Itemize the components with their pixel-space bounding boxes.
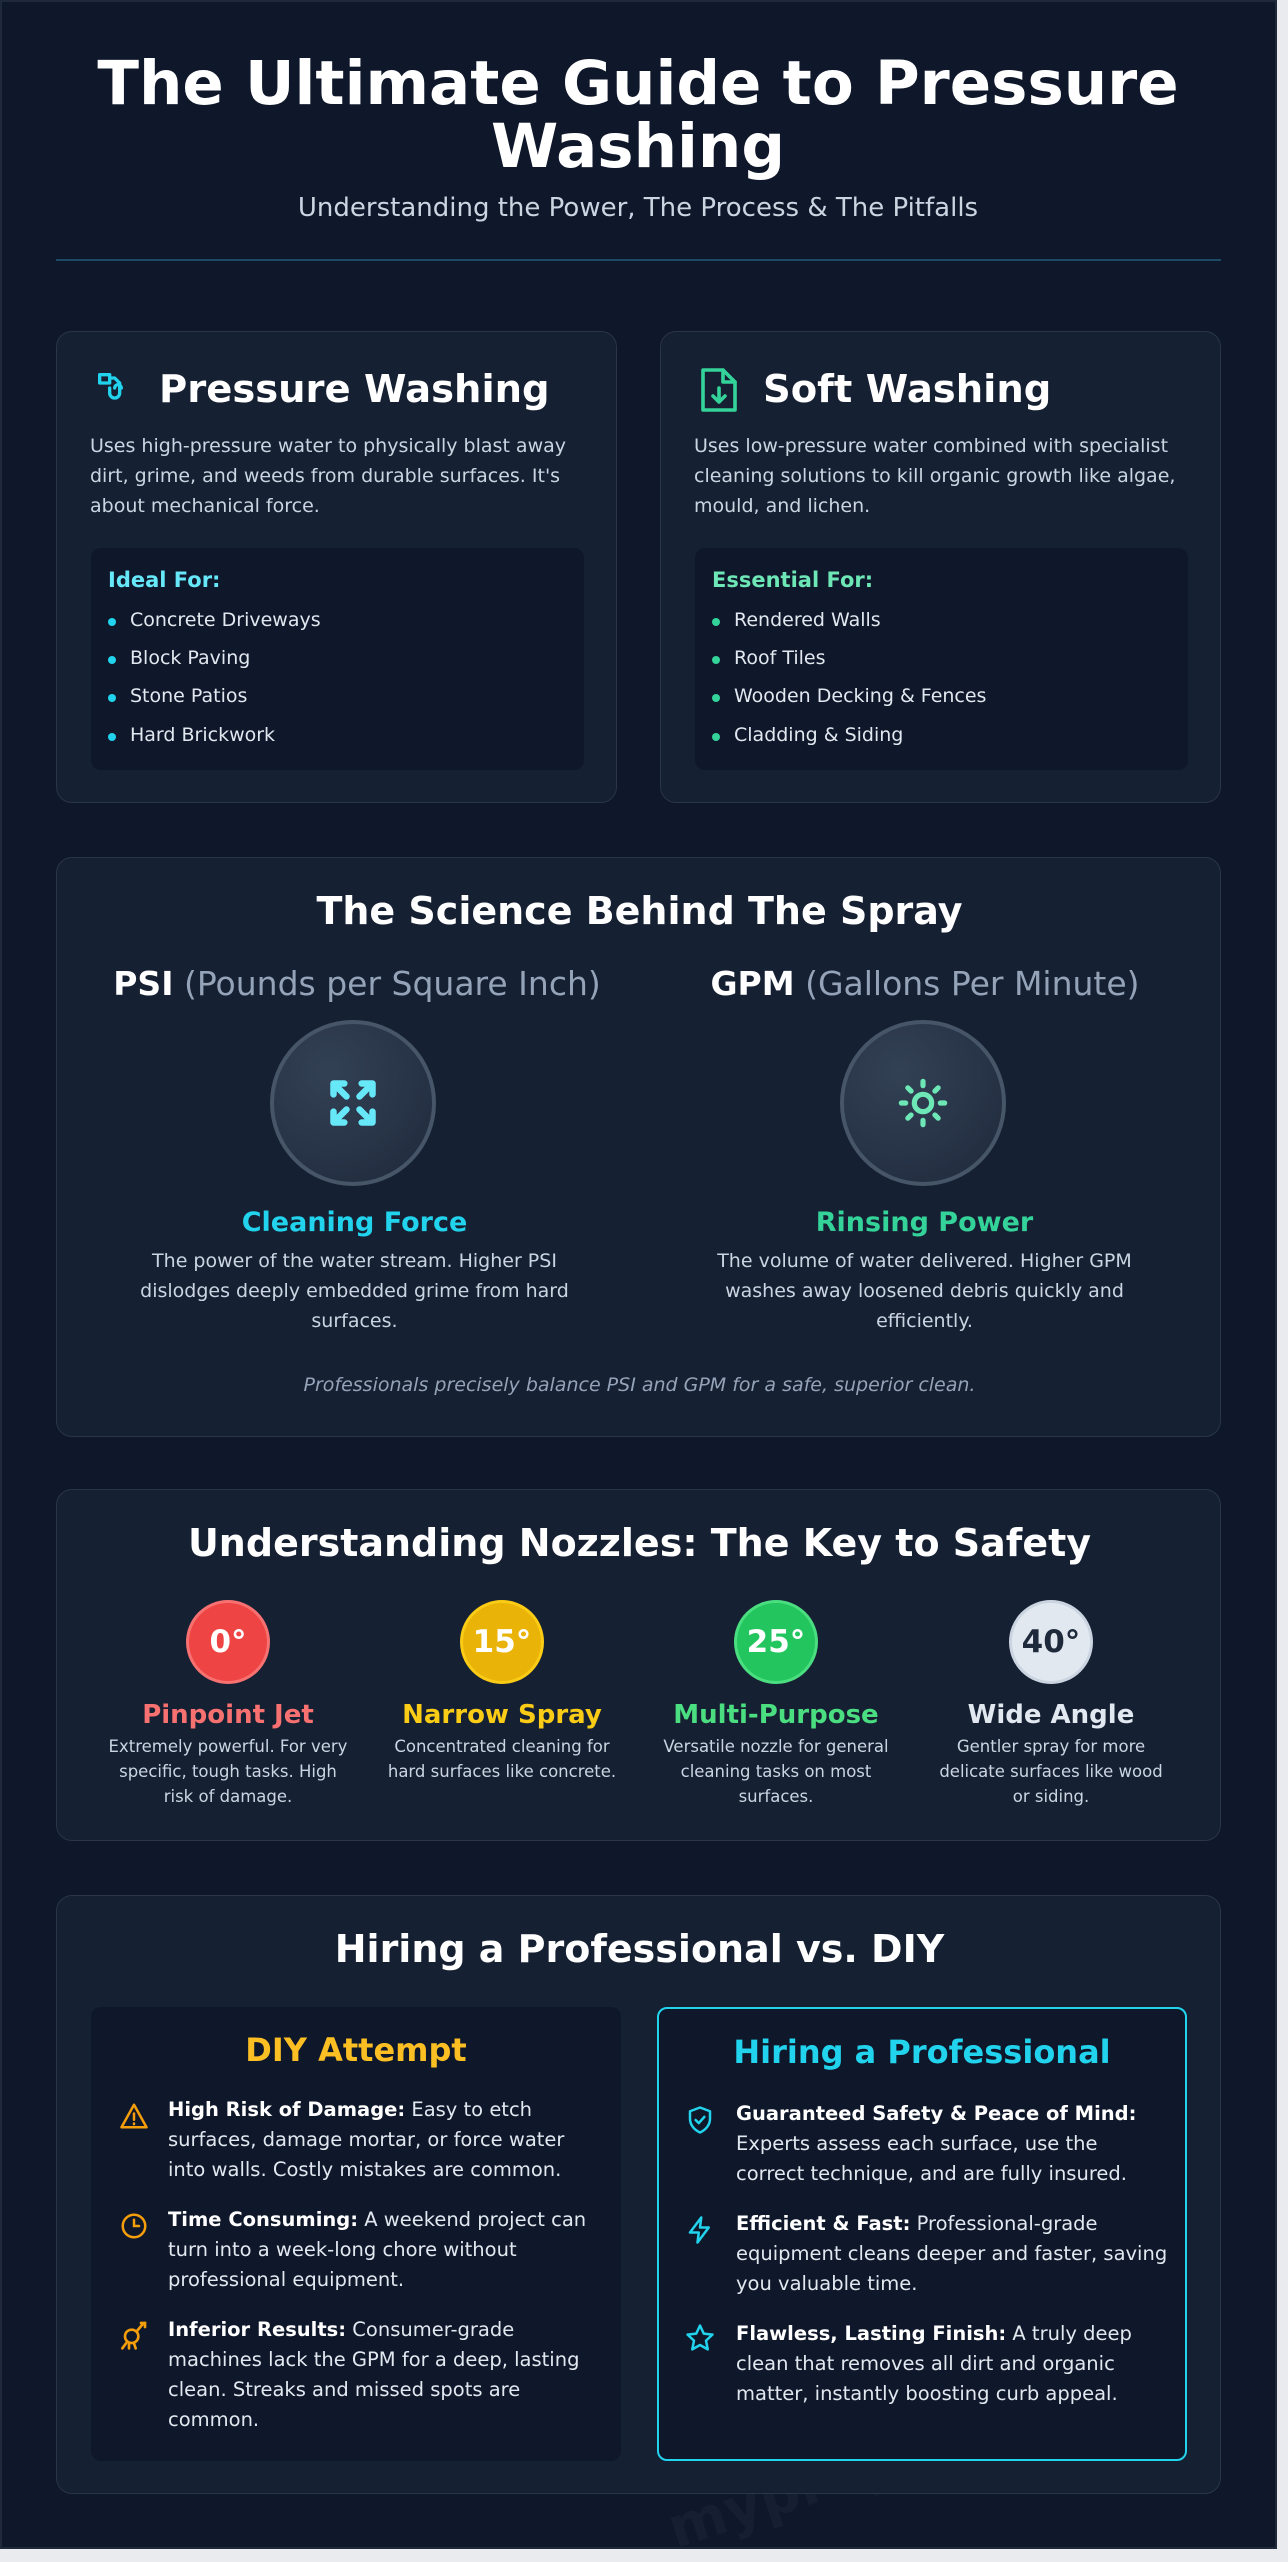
nozzle 40 (939, 1600, 1163, 1806)
item: safety: Guaranteed Safety & Peace of Mind: Experts assess each surface, use the correct technique, and are fully insured. (736, 2102, 1136, 2185)
list: essential for: Essential For: (712, 568, 873, 592)
nozzle 15: Narrow Spray (402, 1700, 602, 1730)
box: diy (91, 2007, 621, 2461)
panel: science (56, 857, 1221, 1437)
title: Washing (491, 111, 785, 182)
gpm column: GPM (Gallons Per Minute) (710, 964, 1140, 1003)
nozzle 0: 0° (209, 1624, 247, 1660)
gpm column (710, 964, 1140, 1186)
list: essential for (695, 548, 1188, 770)
icon: psi circle (270, 1020, 436, 1186)
nozzle 15: 15° (473, 1624, 531, 1660)
icon: spray (98, 373, 123, 400)
list: essential for: Rendered Walls (734, 609, 881, 631)
nozzle 25: 25° (747, 1624, 805, 1660)
title (97, 48, 1179, 182)
list: ideal for: Concrete Driveways (130, 609, 321, 631)
psi column (113, 964, 601, 1186)
text: rinsing power: The volume of water delivered. Higher GPM washes away loosened debris quickly and efficiently. (717, 1250, 1132, 1332)
heading: Understanding Nozzles: The Key to Safety (188, 1521, 1091, 1565)
heading: Pressure Washing (159, 367, 550, 412)
nozzle 25 (663, 1600, 889, 1806)
psi column: PSI (Pounds per Square Inch) (113, 964, 601, 1003)
text: cleaning force: Cleaning Force (242, 1207, 467, 1238)
text: rinsing power (717, 1207, 1132, 1332)
nozzle 0 (109, 1600, 347, 1806)
item: inferior: Inferior Results: Consumer-grade machines lack the GPM for a deep, lasting clean. Streaks and missed spots are common. (168, 2318, 579, 2431)
box: professional (657, 2007, 1187, 2461)
nozzle 40: Wide Angle (968, 1700, 1134, 1730)
item: time: Time Consuming: A weekend project can turn into a week-long chore without professional equipment. (168, 2208, 586, 2291)
text: cleaning force: The power of the water stream. Higher PSI dislodges deeply embedded grime from hard surfaces. (140, 1250, 569, 1332)
text: cleaning force (140, 1207, 569, 1332)
nozzle 40: 40° (1022, 1624, 1080, 1660)
nozzle 40: Gentler spray for more delicate surfaces like wood or siding. (939, 1737, 1163, 1806)
title: The Ultimate Guide to Pressure (97, 48, 1179, 119)
subtitle: Understanding the Power, The Process & The Pitfalls (298, 193, 978, 223)
text: rinsing power: Rinsing Power (816, 1207, 1033, 1238)
panel: pressure washing (56, 331, 617, 803)
description: Uses high-pressure water to physically blast away dirt, grime, and weeds from durable surfaces. It's about mechanical force. (90, 435, 566, 517)
heading: Hiring a Professional vs. DIY (335, 1927, 944, 1971)
heading: The Science Behind The Spray (316, 889, 963, 933)
list: ideal for (91, 548, 584, 770)
icon: file download (701, 368, 737, 412)
icon: gpm circle (840, 1020, 1006, 1186)
nozzle 0: Pinpoint Jet (142, 1700, 314, 1730)
box: professional: Hiring a Professional (733, 2033, 1111, 2071)
item: finish: Flawless, Lasting Finish: A truly deep clean that removes all dirt and organic matter, instantly boosting curb appeal. (736, 2322, 1132, 2405)
panel: hiring vs diy (56, 1895, 1221, 2494)
item: fast: Efficient & Fast: Professional-grade equipment cleans deeper and faster, saving you valuable time. (736, 2212, 1167, 2295)
description: Uses low-pressure water combined with specialist cleaning solutions to kill organic growth like algae, mould, and lichen. (694, 435, 1175, 517)
panel: soft washing (660, 331, 1221, 803)
list: essential for: Wooden Decking & Fences (734, 685, 986, 707)
item: risk: High Risk of Damage: Easy to etch surfaces, damage mortar, or force water into walls. Costly mistakes are common. (168, 2098, 564, 2181)
footnote: Professionals precisely balance PSI and GPM for a safe, superior clean. (304, 1374, 975, 1396)
panel: nozzles (56, 1489, 1221, 1841)
nozzle 0: Extremely powerful. For very specific, tough tasks. High risk of damage. (109, 1737, 347, 1806)
heading: Soft Washing (763, 367, 1051, 412)
nozzle 15: Concentrated cleaning for hard surfaces like concrete. (388, 1737, 616, 1781)
nozzle 25: Multi-Purpose (673, 1700, 879, 1730)
list: essential for: Roof Tiles (734, 647, 826, 669)
box: diy: DIY Attempt (245, 2031, 467, 2069)
list: ideal for: Ideal For: (108, 568, 220, 592)
list: ideal for: Stone Patios (130, 685, 247, 707)
nozzle 15 (388, 1600, 616, 1781)
list: essential for: Cladding & Siding (734, 724, 903, 746)
list: ideal for: Hard Brickwork (130, 724, 275, 746)
list: ideal for: Block Paving (130, 647, 250, 669)
nozzle 25: Versatile nozzle for general cleaning tasks on most surfaces. (663, 1737, 889, 1806)
watermark: myproperty (660, 2386, 1032, 2562)
